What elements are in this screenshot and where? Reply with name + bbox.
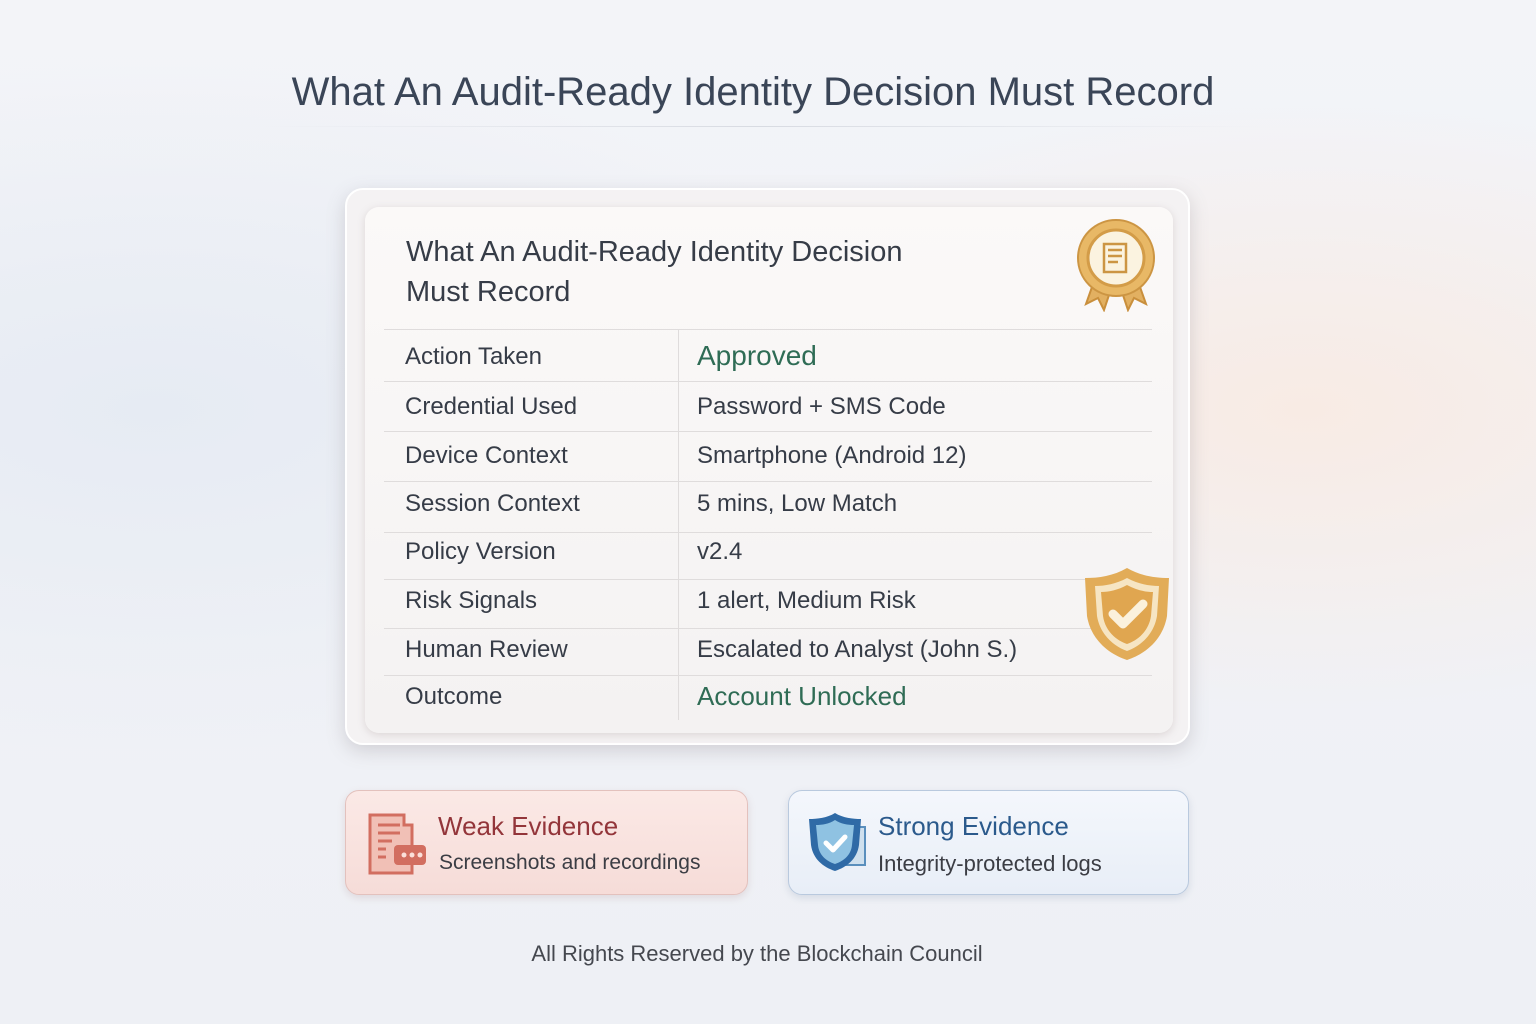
table: 5 mins, Low Match [697,490,897,517]
panel: weak evidence [345,790,748,895]
table: Credential Used [405,393,577,420]
footer: All Rights Reserved by the Blockchain Council [531,941,983,966]
table: Risk Signals [405,587,537,614]
card heading: Must Record [406,276,570,308]
table: Account Unlocked [697,681,907,711]
panel: decision record card [345,188,1190,745]
panel: strong evidence [788,790,1189,895]
icon: blue shield [809,813,866,871]
card heading [406,236,902,308]
table: Password + SMS Code [697,393,946,420]
table: Escalated to Analyst (John S.) [697,636,1017,663]
table: Approved [697,340,817,371]
panel: strong evidence: Strong Evidence [878,811,1069,841]
title: What An Audit-Ready Identity Decision Must Record [292,70,1214,114]
table: v2.4 [697,538,742,565]
table: 1 alert, Medium Risk [697,587,916,614]
panel: strong evidence: Integrity-protected logs [878,851,1102,876]
panel: weak evidence: Screenshots and recordings [439,851,700,874]
table: Human Review [405,636,568,663]
table: Session Context [405,490,580,517]
table: Policy Version [405,538,556,565]
icon: shield check [1085,568,1169,660]
icon: document recording [368,814,426,874]
panel: weak evidence: Weak Evidence [438,811,618,841]
table: Outcome [405,683,502,710]
icon: award badge [1077,219,1155,312]
table: Smartphone (Android 12) [697,442,966,469]
card heading: What An Audit-Ready Identity Decision [406,236,902,268]
table: Action Taken [405,343,542,370]
table: Device Context [405,442,568,469]
